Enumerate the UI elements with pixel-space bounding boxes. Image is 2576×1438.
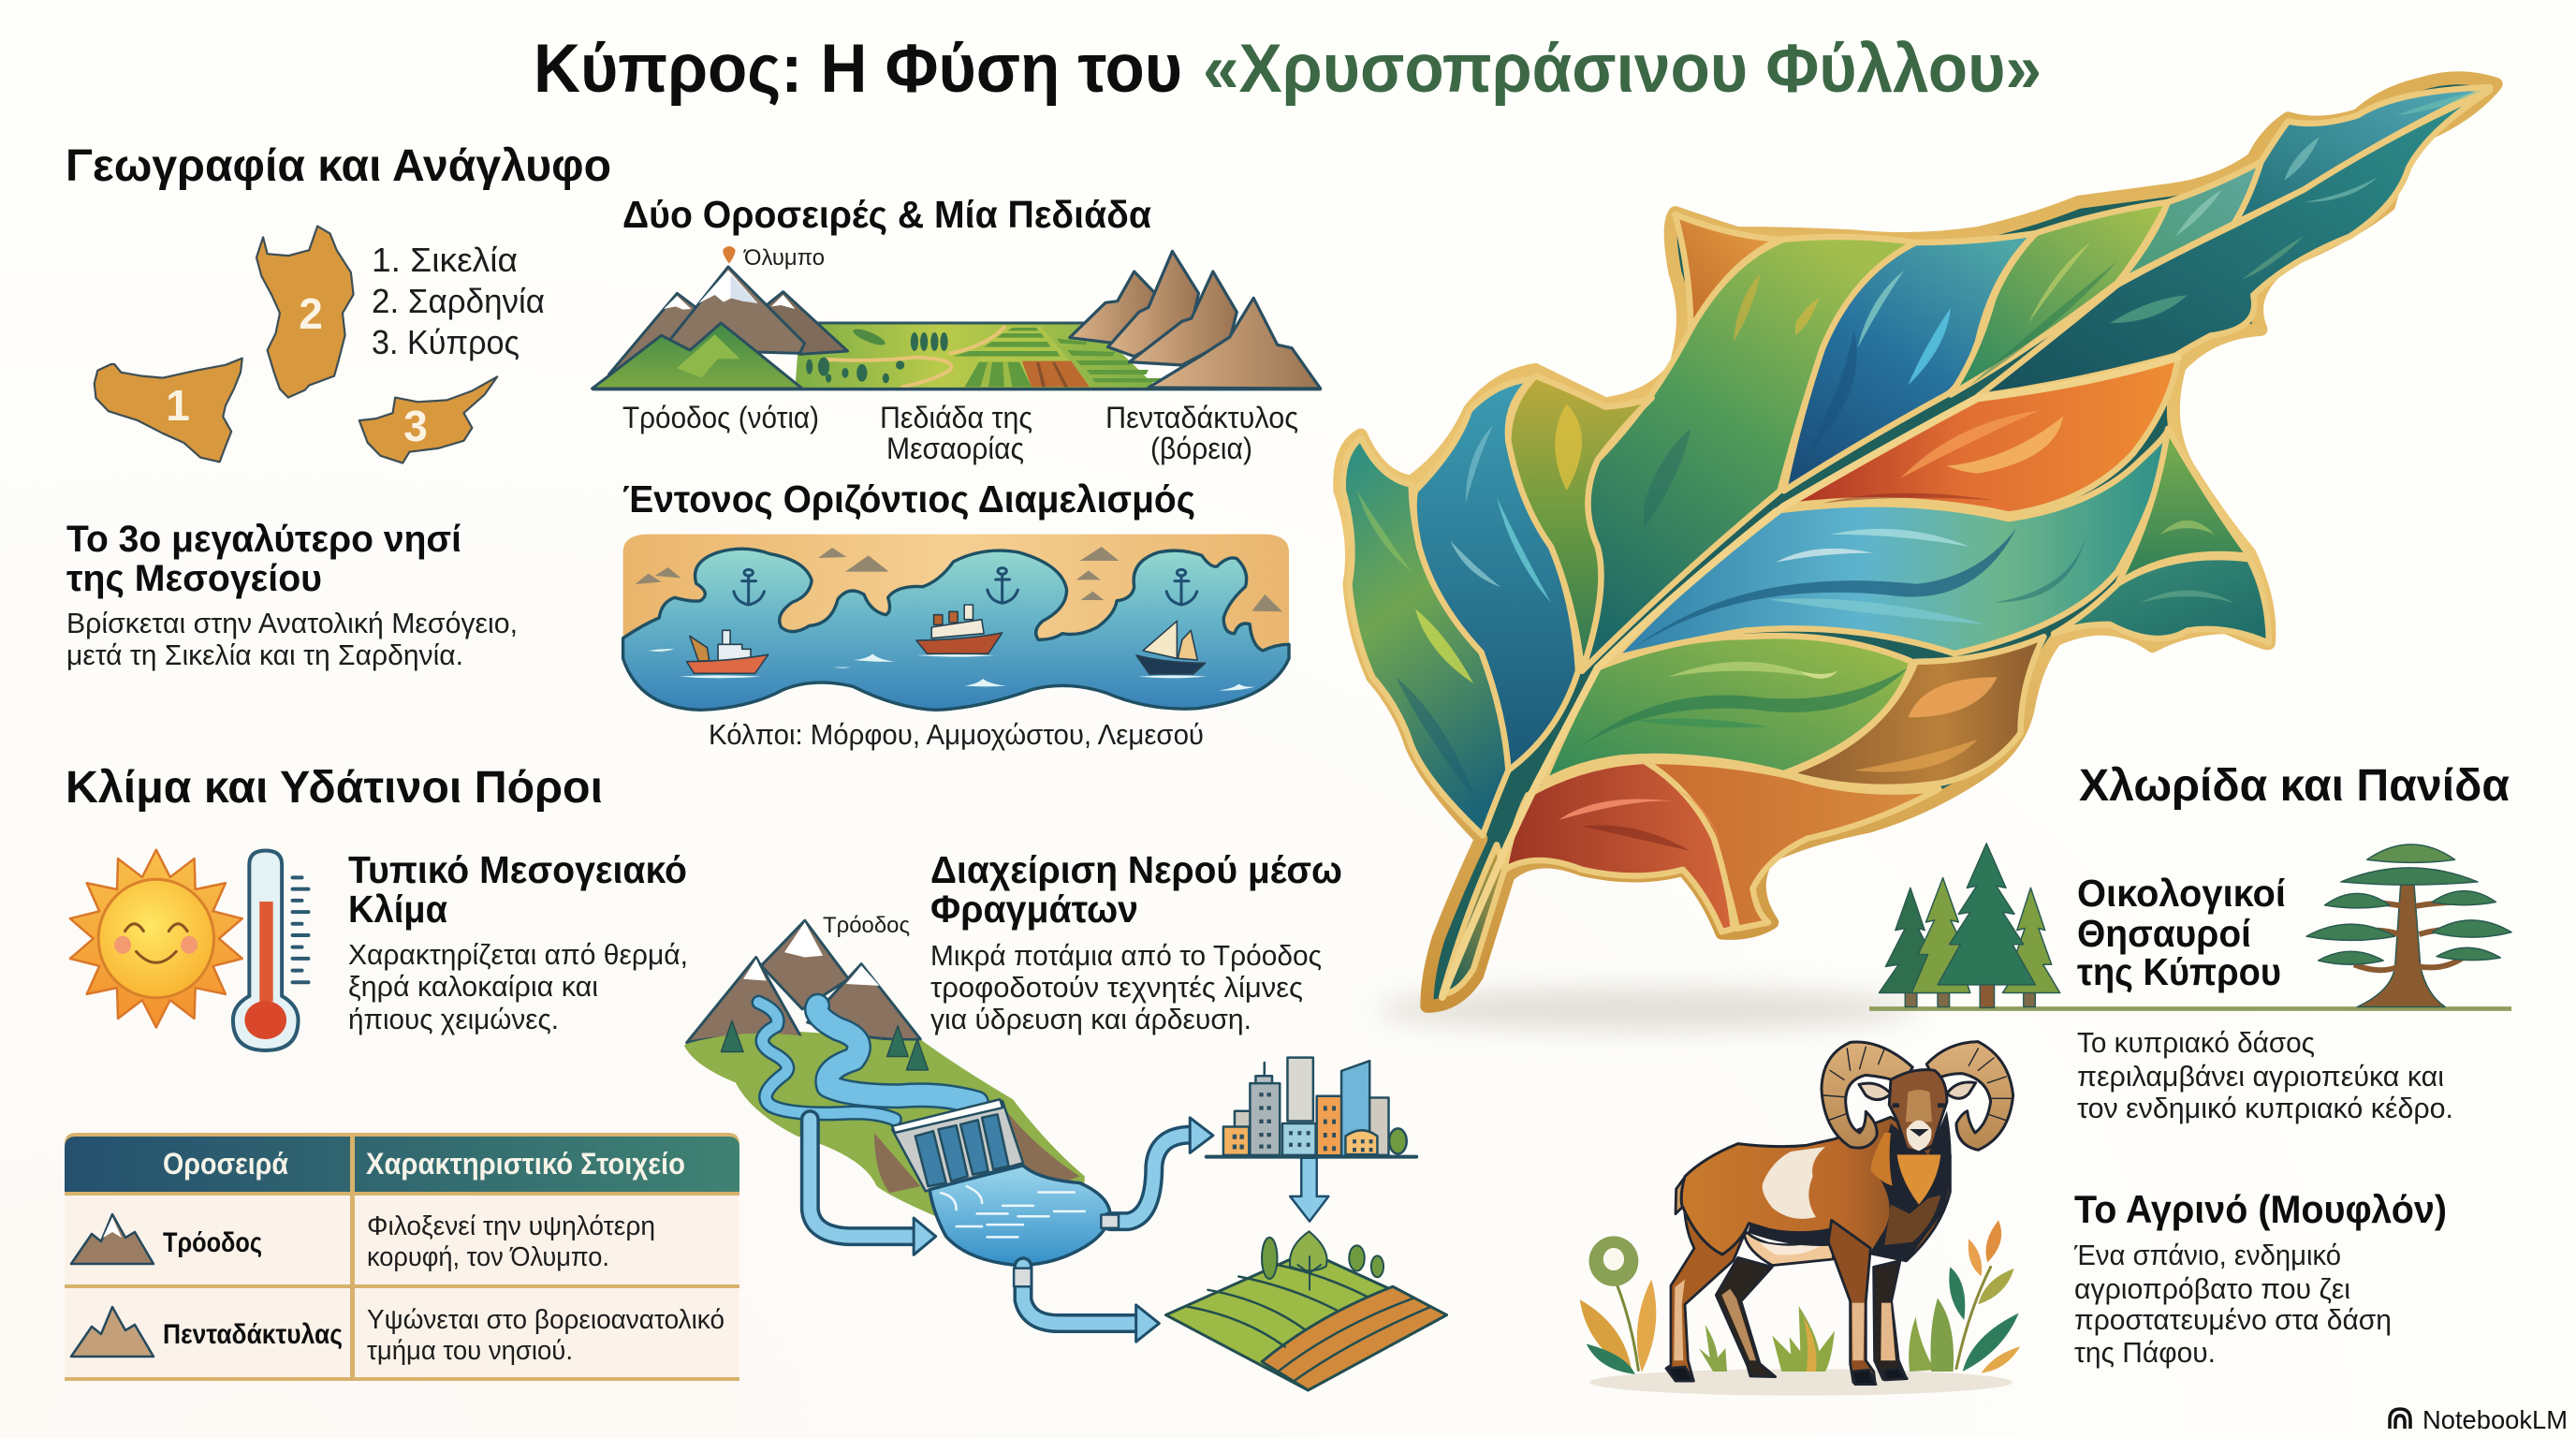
text block: water management [930,848,1342,1035]
landscape labels: Όλυμπο [743,245,825,271]
table header: Οροσειρά [163,1147,288,1181]
anchors [734,568,1197,605]
heading: coastline: Έντονος Οριζόντιος Διαμελισμός [622,477,1195,521]
row: Troodos [71,1211,655,1272]
text block: water management: τροφοδοτούν τεχνητές λίμνες [930,971,1303,1004]
face [1893,1090,1944,1151]
island: Cyprus [359,376,497,463]
Troodos mountains [687,920,930,1079]
horns [1822,1042,2013,1150]
Olympus marker [723,246,736,264]
mouflon and right plants [1666,1042,2020,1385]
pines on hills [721,1020,929,1070]
forest illustration [1869,844,2511,1011]
text block: mouflon: προστατευμένο στα δάση [2074,1303,2392,1336]
title [534,31,2042,107]
leaf gold outline [1339,78,2496,1006]
text block: third largest island: της Μεσογείου [66,558,322,599]
terrain [684,1026,1085,1216]
text block: water management: Μικρά ποτάμια από το Τρόοδος [930,939,1322,972]
heading: climate and water: Κλίμα και Υδάτινοι Πόροι [66,763,603,813]
dark belly band [1748,1223,1832,1246]
text block: Mediterranean climate: Κλίμα [348,888,447,931]
row: Pentadaktylos: Υψώνεται στο βορειοανατολικό [367,1305,724,1335]
text block: mouflon: Ένα σπάνιο, ενδημικό [2073,1239,2341,1271]
island: Sardinia [256,227,354,398]
island numbers [166,289,428,450]
row: Troodos: Τρόοδος [163,1227,262,1258]
pines [1880,844,2060,1007]
white saddle patch [1763,1147,1825,1219]
Troodos label in diagram: Τρόοδος [823,913,910,938]
island numbers: 2 [299,289,323,338]
city windows [1233,1093,1373,1152]
ground line [1869,1006,2511,1011]
rivers [759,1003,977,1120]
text block: mouflon [2073,1187,2447,1369]
island: Sicily [95,359,242,462]
row: Troodos: κορυφή, τον Όλυμπο. [367,1242,609,1272]
farmland [1165,1252,1446,1390]
text block: ecological treasures: τον ενδημικό κυπριακό κέδρο. [2077,1092,2453,1124]
title: «Χρυσοπράσινου Φύλλου» [1203,31,2042,107]
ears [1859,1082,1976,1100]
landscape labels: (βόρεια) [1150,432,1252,465]
landscape labels: Πενταδάκτυλος [1105,401,1298,434]
title: Κύπρος: Η Φύση του [534,31,1182,107]
text block: ecological treasures [2077,872,2453,1124]
table header [65,1133,739,1196]
island numbers: 1 [166,381,190,430]
text block: water management: Φραγμάτων [930,888,1138,931]
icon: smiling sun [70,850,242,1027]
heading: flora and fauna: Χλωρίδα και Πανίδα [2079,761,2510,811]
pipe: reservoir to farmland [1014,1267,1159,1342]
landscape labels [622,245,1298,465]
ship: ferry [916,605,1003,653]
hills on land [636,547,1282,611]
ground shadow [1589,1369,2012,1396]
ship: sailboat [1136,621,1206,674]
text block: third largest island: Βρίσκεται στην Ανατολική Μεσόγειο, [66,607,518,639]
text block: ecological treasures: Οικολογικοί [2077,872,2286,915]
landscape illustration: Troodos, Mesaoria, Pentadaktylos [593,246,1322,389]
Troodos peaks [593,267,848,389]
dam [892,1099,1023,1191]
near hind leg and rump [1666,1186,1749,1381]
leaf midrib [1442,358,2178,997]
bays caption: Κόλποι: Μόρφου, Αμμοχώστου, Λεμεσού [709,718,1204,751]
text block: ecological treasures: Το κυπριακό δάσος [2077,1026,2315,1059]
table rows background [65,1196,739,1380]
plain [795,323,1163,389]
text block: third largest island: μετά τη Σικελία και τη Σαρδηνία. [66,638,463,671]
table gold rules [65,1137,739,1381]
mane [1869,1111,1952,1262]
icon: thermometer [233,850,308,1050]
Pentadaktylos peaks [1070,251,1321,389]
pipe: river to reservoir [810,1120,936,1255]
belly [1744,1233,1833,1266]
city [1223,1058,1407,1156]
baseline [593,388,1322,390]
plants left [1580,1236,1656,1374]
landscape labels: Μεσαορίας [886,432,1024,465]
grass [1699,1306,1835,1372]
tail [1676,1175,1687,1214]
text block: ecological treasures: περιλαμβάνει αγριοπεύκα και [2077,1060,2444,1093]
mouflon ground and left plants [1580,1236,2012,1396]
ship: freighter [687,630,768,673]
landscape labels: Πεδιάδα της [880,401,1032,434]
text block: mouflon: Το Αγρινό (Μουφλόν) [2074,1187,2447,1231]
wave marks [649,649,1256,690]
text block: third largest island [66,519,518,671]
text block: third largest island: Το 3ο μεγαλύτερο νησί [66,519,461,560]
landscape labels: Τρόοδος (νότια) [622,401,819,434]
heading: geography: Γεωγραφία και Ανάγλυφο [66,141,611,191]
NotebookLM logo: NotebookLM [2422,1405,2568,1434]
near front leg [1828,1220,1907,1385]
reservoir [929,1166,1110,1265]
coastline bays illustration [623,535,1289,710]
island comparison map [95,227,497,463]
leaf segments [1343,87,2490,994]
text block: Mediterranean climate: ξηρά καλοκαίρια και [348,970,598,1003]
arrow: city to farmland [1290,1158,1328,1222]
city ground [1207,1155,1416,1159]
water system diagram [684,920,1446,1390]
farm trees [1262,1231,1383,1290]
island legend: 1. Σικελία [372,241,518,279]
island numbers: 3 [403,402,428,450]
row: Pentadaktylos: τμήμα του νησιού. [367,1336,573,1366]
island legend: 3. Κύπρος [372,323,520,361]
island legend: 2. Σαρδηνία [372,282,545,320]
heading: two ranges and a plain: Δύο Οροσειρές & Μία Πεδιάδα [622,193,1151,236]
row: Troodos: Φιλοξενεί την υψηλότερη [367,1211,655,1241]
row: Pentadaktylos: Πενταδάκτυλας [163,1319,343,1350]
plants right [1909,1220,2020,1373]
leaf map of Cyprus [1339,78,2496,1006]
leaf ground shadow [1376,989,1919,1030]
island legend [372,241,545,361]
text block: water management: για ύδρευση και άρδευση. [930,1003,1251,1035]
far hind leg [1716,1257,1776,1377]
text block: ecological treasures: της Κύπρου [2077,950,2281,993]
cedar [2306,844,2511,1007]
sea with coastline [623,549,1289,710]
text block: mouflon: της Πάφου. [2074,1336,2216,1369]
text block: Mediterranean climate [348,848,688,1035]
row: Pentadaktylos [71,1305,724,1366]
pipe: reservoir to city [1101,1118,1213,1228]
far front leg [1874,1261,1907,1379]
torso [1681,1117,1950,1261]
text block: water management: Διαχείριση Νερού μέσω [930,848,1342,891]
table: mountain ranges [65,1133,739,1381]
head [1889,1070,1947,1151]
sand [623,535,1289,662]
text block: Mediterranean climate: Χαρακτηρίζεται από θερμά, [348,938,688,971]
text block: Mediterranean climate: Τυπικό Μεσογειακό [348,848,687,891]
text block: Mediterranean climate: ήπιους χειμώνες. [348,1003,559,1035]
leaf brush highlights [1357,90,2482,851]
table header: Χαρακτηριστικό Στοιχείο [366,1147,685,1181]
text block: mouflon: αγριοπρόβατο που ζει [2074,1272,2350,1305]
text block: ecological treasures: Θησαυροί [2077,912,2251,955]
